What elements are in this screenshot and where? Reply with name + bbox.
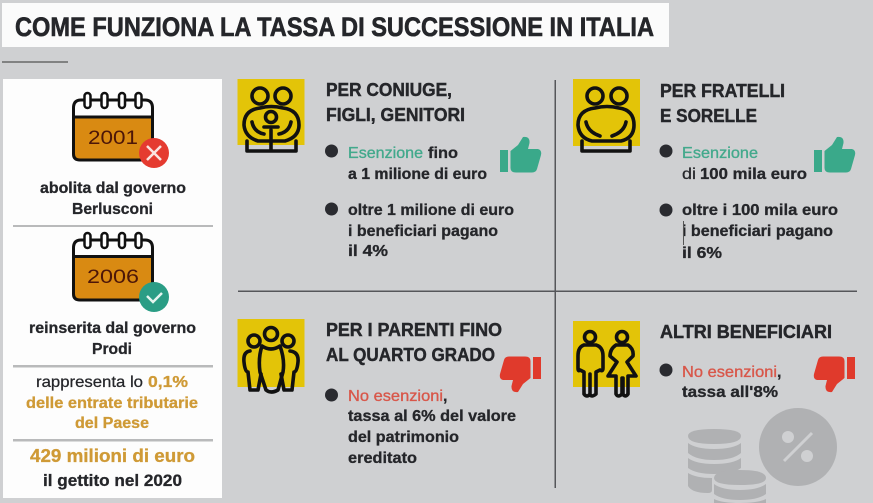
bullet: above threshold: il 4% (348, 243, 388, 260)
bullet: no exemption: , (777, 364, 781, 381)
heading: PER CONIUGE, (326, 79, 452, 100)
icon: thumb up (814, 137, 855, 172)
icon: family (238, 79, 304, 151)
panel: relatives up to fourth degree (238, 319, 541, 467)
title (2, 3, 669, 47)
heading: ALTRI BENEFICIARI (660, 321, 832, 342)
bullet: exemption: Esenzione (682, 145, 758, 162)
heading (326, 79, 465, 125)
bullet: exemption: Esenzione (348, 145, 423, 162)
text: share of tax revenue: del Paese (75, 415, 149, 432)
bullet: above threshold (325, 202, 514, 260)
title: COME FUNZIONA LA TASSA DI SUCCESSIONE IN ITALIA (15, 12, 654, 42)
icon: calendar 2006 reintroduced: 2006 (87, 267, 139, 288)
icon: thumb up (500, 137, 541, 172)
heading: E SORELLE (660, 105, 757, 126)
panel: other beneficiaries (573, 321, 855, 503)
text: share of tax revenue: rappresenta lo (36, 374, 143, 391)
text: abolita dal governo Berlusconi: Berlusconi (72, 201, 153, 218)
heading: PER I PARENTI FINO (326, 319, 502, 340)
icon: three people (238, 319, 304, 392)
bullet: no exemption: No esenzioni (348, 388, 443, 405)
text: share of tax revenue: 0,1% (148, 374, 188, 391)
bullet: above threshold (660, 202, 838, 262)
panel: brothers and sisters (573, 79, 855, 262)
text: share of tax revenue: delle entrate tributarie (26, 395, 198, 412)
bullet: above threshold: i beneficiari pagano (682, 223, 833, 240)
icon: siblings (573, 79, 640, 151)
heading (326, 319, 502, 365)
bullet: exemption: 100 mila euro (700, 166, 807, 183)
text: reinserita dal governo Prodi (29, 320, 196, 358)
text: reinserita dal governo Prodi: reinserita dal governo (29, 320, 196, 337)
bullet: no exemption: tassa all'8% (682, 384, 778, 401)
heading: PER FRATELLI (660, 80, 785, 101)
bullet: no exemption: del patrimonio (348, 429, 459, 446)
bullet: no exemption (325, 388, 516, 467)
heading (660, 80, 785, 126)
icon: coins and percent (688, 408, 837, 503)
text: revenue in 2020 (30, 446, 195, 490)
icon: thumb down (814, 356, 855, 392)
heading: AL QUARTO GRADO (326, 344, 495, 365)
bullet: exemption (660, 144, 807, 183)
bullet: above threshold: oltre i 100 mila euro (682, 202, 838, 219)
bullet: exemption: di (682, 166, 696, 183)
icon: calendar 2001 abolished (74, 93, 169, 168)
bullet: above threshold: il 6% (682, 245, 722, 262)
bullet: exemption: a 1 milione di euro (348, 166, 487, 183)
panel: spouse, children, parents (238, 79, 541, 260)
text: abolita dal governo Berlusconi: abolita dal governo (40, 180, 186, 197)
text: share of tax revenue (26, 374, 198, 432)
icon: calendar 2006 reintroduced (74, 233, 169, 312)
bullet: above threshold: i beneficiari pagano (348, 223, 498, 240)
text: revenue in 2020: il gettito nel 2020 (43, 471, 182, 490)
icon: thumb down (500, 356, 541, 392)
bullet: exemption (325, 144, 487, 183)
text: abolita dal governo Berlusconi (40, 180, 186, 218)
bullet: no exemption: tassa al 6% del valore (348, 408, 516, 425)
icon: calendar 2001 abolished: 2001 (88, 128, 138, 149)
text: reinserita dal governo Prodi: Prodi (92, 341, 132, 358)
text: revenue in 2020: 429 milioni di euro (30, 446, 195, 466)
panel: timeline and key figures (3, 79, 222, 498)
bullet: no exemption: ereditato (348, 450, 417, 467)
bullet: above threshold: oltre 1 milione di euro (348, 202, 514, 219)
heading: FIGLI, GENITORI (326, 104, 465, 125)
bullet: no exemption: No esenzioni (682, 364, 777, 381)
bullet: no exemption (660, 364, 781, 401)
bullet: no exemption: , (443, 388, 447, 405)
icon: man and woman (573, 321, 640, 396)
bullet: exemption: fino (428, 145, 458, 162)
